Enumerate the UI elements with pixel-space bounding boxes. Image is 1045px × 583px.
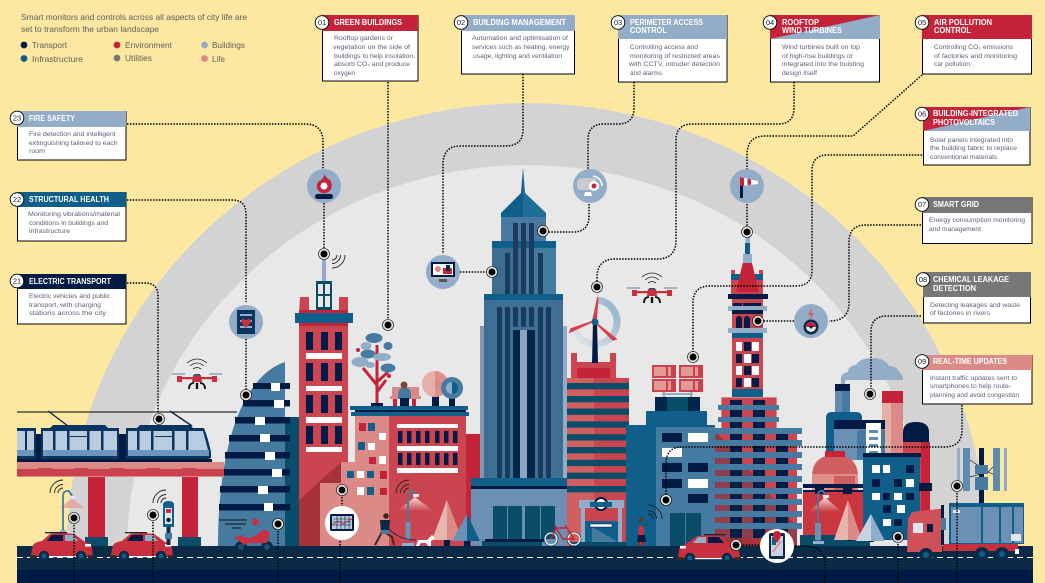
connector: street nodes down — [74, 490, 957, 583]
runner with dog — [375, 513, 435, 546]
connector: perimeter access to node — [547, 204, 589, 232]
card 08: chemical leakage detection: Detecting leakages and waste — [930, 302, 1020, 309]
legend — [21, 40, 245, 64]
bicycle — [544, 525, 581, 546]
card 04: rooftop wind turbines: of high-rise buildings or — [782, 53, 854, 60]
underground station entrance — [570, 498, 627, 546]
curved tower — [218, 362, 299, 546]
building: pink stepped block — [320, 416, 389, 546]
card 21: electric transport — [10, 274, 126, 324]
connector: smart grid to node — [762, 320, 794, 322]
card 05: air pollution control: car pollution — [934, 61, 970, 68]
solar panels — [652, 365, 703, 397]
intro text: Smart monitors and controls across all aspects of city life are — [21, 12, 247, 22]
card 03: perimeter access control: with CCTV, intruder detection — [628, 61, 720, 68]
card 07: smart grid — [915, 197, 1032, 244]
card 06: building-integrated photovoltaics: conventional materials — [930, 154, 998, 161]
card 01: green buildings: Rooftop gardens or — [334, 35, 394, 42]
connector: 08 chemical leakage — [871, 316, 921, 390]
legend: Infrastructure — [32, 54, 83, 64]
street lamp right — [809, 491, 842, 544]
building: blue block — [626, 397, 715, 546]
card 07: smart grid: SMART GRID — [933, 200, 979, 209]
card 07: smart grid: 07 — [918, 200, 926, 209]
card 21: electric transport: transport, with charging — [29, 302, 101, 309]
rooftop bench with person — [390, 382, 421, 406]
card 04: rooftop wind turbines: Wind turbines built on top — [782, 44, 860, 51]
rooftop wind turbine — [570, 297, 620, 363]
triangle trees centre — [432, 500, 480, 546]
card 09: real-time updates: 09 — [918, 357, 926, 366]
car 3 — [677, 534, 741, 563]
card 23: fire safety — [10, 111, 126, 160]
card 02: building management: usage, lighting and ventilation — [473, 53, 562, 60]
nodes — [68, 226, 962, 550]
drone left — [172, 359, 222, 389]
card 21: electric transport: stations across the city — [29, 310, 107, 317]
background dome: inner light arc — [127, 165, 927, 560]
card 03: perimeter access control: 03 — [614, 18, 622, 27]
connector: 21 electric transport — [127, 283, 158, 415]
card 03: perimeter access control: Controlling access and — [630, 44, 698, 51]
card 22: structural health: conditions in buildings and — [29, 220, 108, 227]
card 22: structural health: 22 — [13, 195, 21, 204]
icon: wind sock — [730, 169, 764, 203]
card 09: real-time updates: Instant traffic updates sent to — [930, 375, 1017, 382]
card 08: chemical leakage detection: DETECTION — [933, 284, 976, 293]
card 05: air pollution control: Controlling CO₂ emissions — [934, 44, 1014, 51]
connector: 22 structural health — [127, 200, 246, 302]
card 07: smart grid: Energy consumption monitoring — [929, 217, 1025, 224]
triangle trees right — [834, 500, 885, 542]
connector: building management to node — [460, 271, 488, 273]
legend: Buildings — [212, 40, 245, 50]
card 02: building management: 02 — [457, 18, 465, 27]
connector: 03 perimeter access — [588, 82, 634, 169]
connector: 06 photovoltaics — [693, 155, 922, 353]
card 04: rooftop wind turbines: design itself — [782, 70, 817, 77]
card 04: rooftop wind turbines: integrated into the building — [782, 61, 864, 68]
car 1 — [30, 532, 94, 561]
card 22: structural health: STRUCTURAL HEALTH — [29, 195, 109, 204]
tram — [17, 411, 212, 462]
card 06: building-integrated photovoltaics: the building fabric to replace — [930, 145, 1017, 152]
card 01: green buildings: GREEN BUILDINGS — [334, 18, 403, 27]
card 01: green buildings: 01 — [318, 18, 326, 27]
card 23: fire safety: Fire detection and intelligent — [29, 131, 116, 138]
motorcycle — [219, 518, 273, 553]
road — [17, 546, 1033, 583]
card 03: perimeter access control: and alarms — [630, 70, 663, 77]
parking meter — [153, 490, 174, 545]
icon: CCTV camera — [573, 169, 607, 203]
connector: 07 smart grid — [829, 225, 921, 321]
factory blue block — [863, 453, 932, 540]
factory with chimneys and cloud — [800, 358, 930, 546]
legend: Transport — [32, 40, 68, 50]
card 04: rooftop wind turbines: 04 — [766, 18, 774, 27]
card 22: structural health: Monitoring vibrations/material — [28, 211, 121, 218]
card 03: perimeter access control: monitoring of restricted areas — [630, 53, 721, 60]
card 22: structural health: infrastructure — [29, 228, 70, 235]
connector: 05 air pollution — [747, 75, 922, 169]
building: tall red tower — [715, 237, 802, 546]
card 03: perimeter access control: CONTROL — [630, 26, 667, 35]
icon: fire safety — [307, 169, 341, 203]
legend: Utilities — [125, 53, 152, 63]
connector: fire safety to node — [323, 203, 325, 250]
building: red tower — [295, 258, 353, 546]
connector: 09 real-time updates — [666, 405, 962, 496]
building: striped red with turbine base — [567, 353, 629, 546]
card 21: electric transport: ELECTRIC TRANSPORT — [29, 277, 111, 286]
intro text: set to transform the urban landscape — [21, 24, 159, 34]
lorry — [907, 503, 1024, 562]
intro text — [21, 12, 247, 34]
connector: 04 rooftop wind turbines — [597, 82, 794, 283]
drone right — [627, 273, 677, 303]
icon: phone map — [760, 529, 794, 563]
card 04: rooftop wind turbines: ROOFTOP — [782, 18, 820, 27]
card 08: chemical leakage detection: CHEMICAL LEAKAGE — [933, 275, 1010, 284]
card 05: air pollution control — [915, 15, 1032, 74]
card 23: fire safety: 23 — [13, 114, 21, 123]
connector: air pollution to node — [746, 204, 748, 228]
card 01: green buildings: buildings to help insulation, — [334, 53, 415, 60]
card 23: fire safety: extinguishing tailored to each — [29, 140, 118, 147]
card 01: green buildings: vegetation on the side of — [333, 44, 410, 51]
card 03: perimeter access control — [611, 15, 727, 82]
background dome: outer grey arc — [67, 103, 987, 560]
car 2 — [110, 532, 174, 561]
card 05: air pollution control: 05 — [918, 18, 926, 27]
connector: 02 building management — [443, 74, 523, 254]
card 06: building-integrated photovoltaics: PHOTOVOLTAICS — [933, 118, 996, 127]
connector: 01 green buildings — [387, 82, 389, 321]
card 06: building-integrated photovoltaics — [915, 107, 1030, 165]
card 08: chemical leakage detection — [916, 272, 1031, 323]
card 21: electric transport: Electric vehicles and public — [29, 293, 111, 300]
card 02: building management: Automation and optimisation of — [472, 35, 568, 42]
card 06: building-integrated photovoltaics: BUILDING-INTEGRATED — [933, 109, 1018, 118]
card 05: air pollution control: AIR POLLUTION — [934, 18, 992, 27]
card 01: green buildings: oxygen — [334, 70, 355, 77]
card 21: electric transport: 21 — [13, 277, 21, 286]
icon: tablet chart — [325, 506, 359, 540]
street lamp left — [50, 480, 84, 535]
rooftop tree — [352, 333, 396, 406]
elevated viaduct — [17, 462, 224, 546]
connector: 23 fire safety — [127, 124, 323, 170]
card 05: air pollution control: CONTROL — [934, 26, 971, 35]
card 03: perimeter access control: PERIMETER ACCESS — [630, 18, 704, 27]
card 04: rooftop wind turbines: WIND TURBINES — [782, 26, 843, 35]
card 02: building management: services such as heating, energy — [472, 44, 570, 51]
card 08: chemical leakage detection: 08 — [919, 275, 927, 284]
card 01: green buildings: absorb CO₂ and produce — [334, 61, 410, 68]
street lamp centre — [396, 480, 433, 546]
card 01: green buildings — [315, 15, 418, 81]
icon: smart meter — [794, 304, 828, 338]
card 02: building management: BUILDING MANAGEMENT — [473, 18, 566, 27]
building: red office block — [350, 406, 469, 546]
legend: Environment — [125, 40, 173, 50]
overhead wire — [17, 411, 237, 413]
connector: structural health to node — [245, 339, 247, 391]
card 22: structural health — [10, 192, 126, 241]
card 09: real-time updates: smartphones to help route- — [930, 383, 1011, 390]
building: red backing and skyscraper — [466, 168, 577, 546]
rooftop sculptures — [422, 371, 463, 406]
card 09: real-time updates — [915, 355, 1032, 404]
icon: structural health — [229, 305, 263, 339]
card 04: rooftop wind turbines — [763, 15, 880, 82]
card 09: real-time updates: REAL-TIME UPDATES — [933, 357, 1008, 366]
card 05: air pollution control: of factories and monitoring — [934, 53, 1017, 60]
card 06: building-integrated photovoltaics: 06 — [918, 110, 926, 119]
card 23: fire safety: FIRE SAFETY — [29, 114, 76, 123]
card 09: real-time updates: planning and avoid congestion — [930, 392, 1019, 399]
card 02: building management — [454, 15, 575, 74]
person with phone — [637, 505, 662, 546]
card 23: fire safety: room — [29, 148, 46, 155]
wifi arcs on tower — [332, 255, 345, 268]
legend: Life — [212, 54, 225, 64]
icon: monitor — [426, 255, 460, 289]
card 07: smart grid: and management — [929, 226, 981, 233]
card 06: building-integrated photovoltaics: Solar panels integrated into — [930, 137, 1013, 144]
antenna mast — [957, 448, 1007, 504]
card 08: chemical leakage detection: of factories in rivers — [930, 310, 991, 317]
